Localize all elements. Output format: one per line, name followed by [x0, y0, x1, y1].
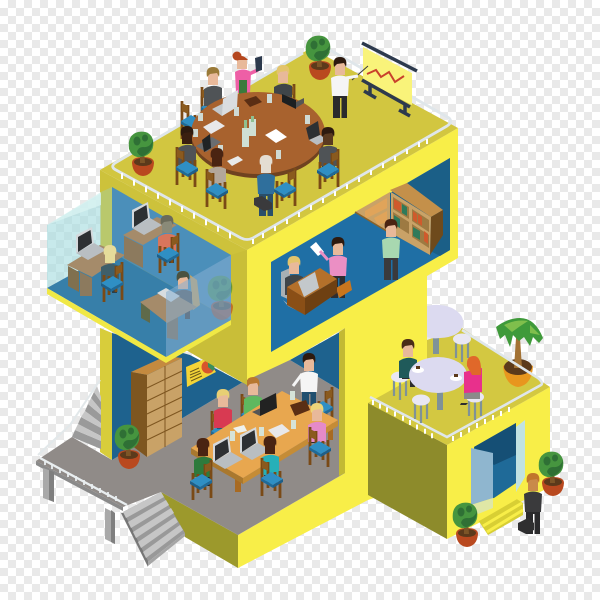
laptop left: [196, 134, 221, 152]
filing cabinet: [131, 356, 182, 457]
laptop dark: [282, 94, 304, 109]
door opening: [474, 423, 516, 500]
person: standing man in white: [293, 353, 318, 414]
person: grey haired man in blue suit: [254, 155, 275, 216]
chair middle glass room: [157, 233, 179, 273]
icon: plant right of door: [539, 452, 564, 496]
panel: rooftop deck: [100, 48, 458, 250]
left door leaf: [471, 448, 493, 505]
door steps: [478, 498, 523, 535]
books: [394, 199, 428, 244]
papers: [203, 120, 225, 134]
book: [290, 400, 310, 416]
person: presenter: [331, 57, 358, 118]
icon: plant left of roof: [129, 132, 154, 176]
briefcase: [254, 196, 272, 211]
landing edge: [36, 461, 123, 511]
person: red shirt blond woman: [214, 389, 232, 437]
landing rail: [40, 458, 127, 505]
left column: [100, 328, 112, 460]
shelf front: [391, 192, 431, 255]
notepad: [233, 425, 247, 433]
office desk: [287, 268, 337, 315]
person: right seated man: [319, 127, 337, 175]
glass ceiling: [47, 192, 101, 225]
meeting chairs back: [211, 387, 333, 451]
person: woman at cafe table: [460, 356, 482, 405]
window floor: [271, 158, 450, 352]
cafe railing: [370, 330, 542, 441]
person: man at cafe table: [399, 339, 417, 387]
tower lower section: [238, 128, 458, 568]
right door leaf: [516, 420, 525, 492]
cups: [230, 391, 296, 441]
room floor: [47, 252, 231, 357]
laptop silver: [212, 90, 238, 116]
front stairs: [121, 492, 185, 567]
icon: plant left of door: [453, 503, 478, 547]
glass side wall: [47, 187, 112, 288]
laptop: [213, 436, 243, 469]
window back wall: [357, 158, 450, 256]
person: man in grey suit: [174, 271, 192, 319]
glass back wall: [112, 187, 231, 320]
orange office chair: [190, 275, 200, 310]
book: [244, 96, 262, 107]
laptop right: [306, 121, 328, 145]
person: teal woman: [261, 436, 279, 484]
panel: doorway: [471, 420, 525, 535]
panel: glass room: [47, 187, 231, 363]
person: blond man at desk: [285, 256, 303, 304]
panel: upper left face: [100, 170, 247, 385]
left shelf: [355, 192, 390, 233]
meeting chairs front: [190, 427, 331, 500]
glass front panel: [166, 255, 231, 357]
icon: plant top of roof: [306, 36, 331, 80]
stair rail: [38, 380, 100, 455]
column seen through glass: [101, 187, 112, 258]
back wall: [112, 333, 247, 460]
panel: cafe block: [238, 128, 550, 568]
back stairs: [38, 380, 101, 455]
panel: upper right window: [271, 158, 450, 352]
person: seated woman in grey: [208, 148, 226, 196]
poster: pie chart: [186, 358, 216, 387]
person: woman with tablet: [232, 52, 262, 96]
cafe block left face: [368, 403, 447, 539]
floor edge: [47, 288, 231, 363]
cafe stool back: [453, 334, 471, 362]
bookshelf: [355, 183, 443, 255]
glass room desk front: [140, 288, 197, 340]
panel: ground floor: [36, 328, 345, 568]
person: blond worker: [101, 245, 119, 293]
floor: [36, 360, 345, 535]
person: orange shirt worker: [158, 215, 176, 263]
person: green shirt man: [244, 377, 262, 425]
person: woman reading: [382, 219, 400, 280]
person: grey suit man: [204, 67, 222, 115]
back cafe table: [427, 305, 463, 354]
cafe table: [409, 357, 467, 410]
briefcase: [336, 280, 352, 298]
chair left glass room: [101, 262, 123, 302]
ground floor slab left face: [161, 492, 238, 568]
person: pink blond woman: [308, 403, 326, 451]
laptop: [240, 427, 270, 460]
inner pillar: [339, 328, 345, 476]
icon: palm tree: [496, 318, 543, 387]
shelf side: [430, 210, 443, 255]
paper: [268, 424, 290, 438]
meeting table: [191, 391, 338, 492]
office chair window: [281, 268, 296, 310]
cafe roof deck: [368, 328, 550, 445]
glass room desk left: [67, 227, 125, 296]
conference chairs back: [181, 84, 295, 141]
laptop: [252, 393, 277, 416]
person: man handing paper: [310, 237, 347, 298]
support pillars: [43, 468, 54, 502]
conference chairs front: [176, 147, 339, 209]
icon: plant by cabinet: [115, 425, 140, 469]
person: businessman with briefcase: [518, 473, 542, 534]
shelf cubbies: [393, 197, 429, 248]
icon: plant behind glass: [208, 276, 233, 320]
cafe block right face: [447, 387, 550, 539]
glass room desk middle: [123, 202, 177, 268]
water bottles: [242, 119, 256, 147]
glasses: [193, 94, 310, 159]
roof railing: [113, 50, 451, 244]
shelf top: [390, 183, 443, 217]
person: dark green man: [194, 438, 212, 486]
person: blond man with tie: [274, 65, 292, 113]
round conference table: [191, 90, 328, 178]
person: left seated man: [178, 126, 196, 174]
presentation board: [352, 43, 417, 116]
icon: cafe stools: [391, 372, 484, 423]
